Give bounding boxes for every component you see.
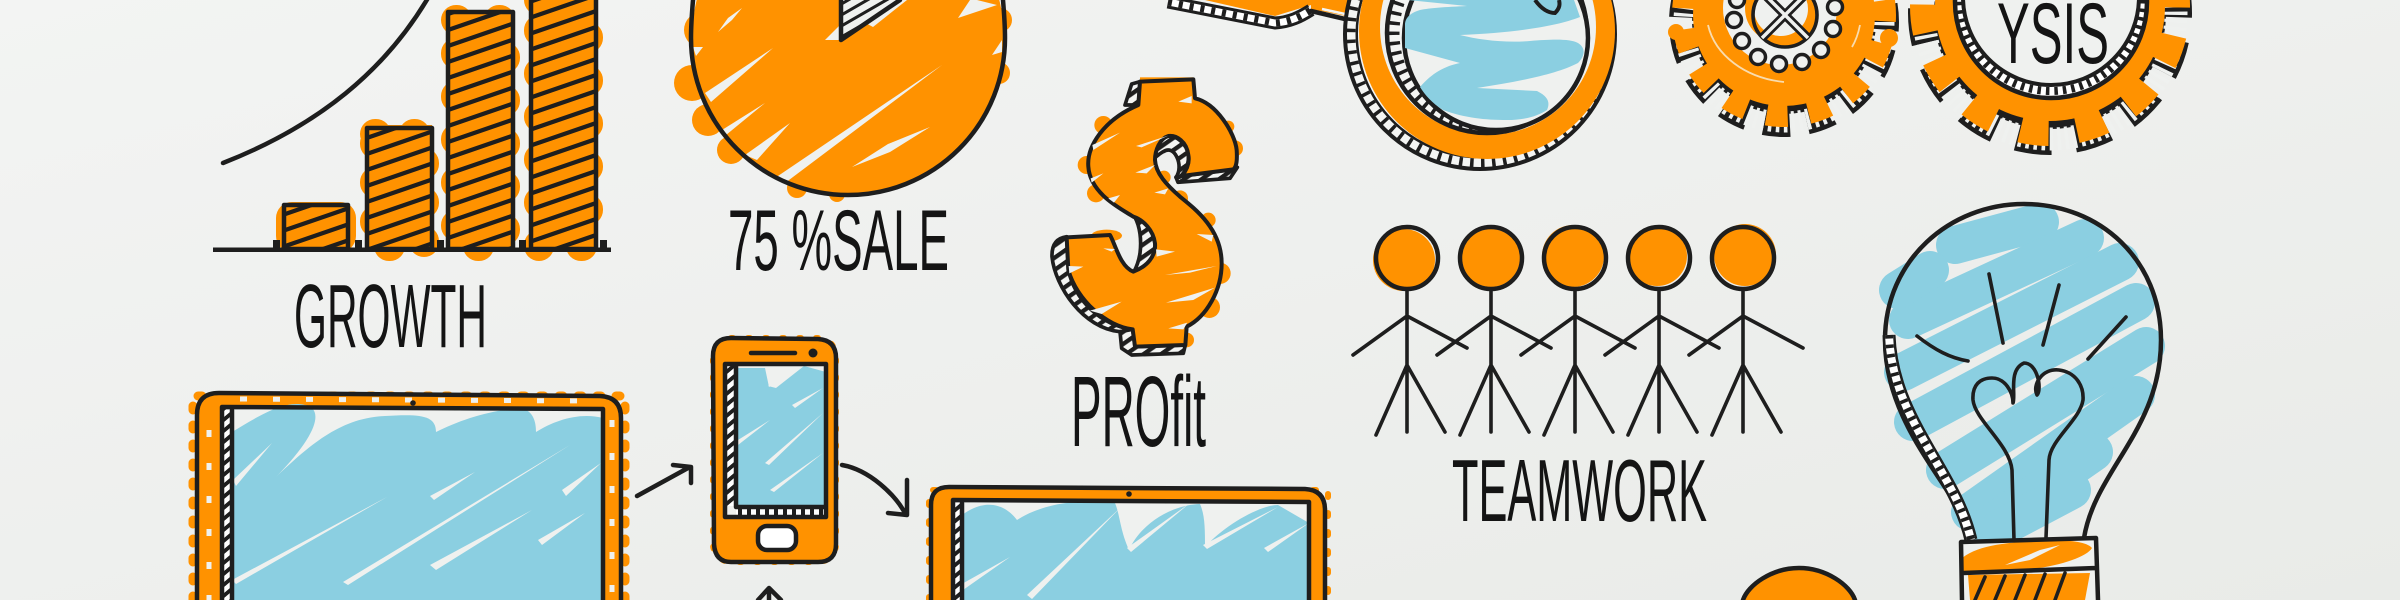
bar 3 [448, 10, 513, 252]
white inner ring [1380, 0, 1596, 135]
home button [758, 526, 796, 550]
person 5 [1689, 224, 1803, 435]
hatched edge [1889, 335, 1971, 540]
handle [1168, 0, 1350, 23]
highlight arcs [1708, 25, 1860, 82]
light streaks [693, 0, 1002, 183]
icon: small round dome [1741, 568, 1857, 600]
base [1960, 538, 2098, 600]
lens with inner hatch [1387, 0, 1588, 133]
screen background [222, 407, 603, 600]
outlines [197, 393, 621, 600]
dollar face [1067, 79, 1237, 347]
chart: growth bars [213, 0, 611, 252]
text: GROWTH [294, 267, 487, 367]
screen blue scribble [232, 404, 603, 600]
streaks [960, 503, 1309, 599]
frame fringe [193, 396, 625, 600]
growth curve [223, 0, 428, 163]
streaks [232, 443, 601, 585]
outer hatched rim [1345, 0, 1615, 169]
light streaks [1069, 96, 1217, 329]
camera dot [1126, 491, 1132, 497]
icon: magnifying glass [1168, 0, 1615, 169]
icon: dollar sign [1052, 77, 1243, 355]
person 4 [1605, 226, 1719, 435]
filament [1973, 363, 2083, 540]
device: right tablet [929, 487, 1328, 600]
bulb outline [1885, 204, 2161, 542]
text: PROfit [1071, 356, 1206, 468]
orange ring [1359, 0, 1615, 159]
tablet frame [933, 489, 1323, 600]
speaker and sensor [751, 351, 795, 355]
person 2 [1437, 227, 1551, 435]
hatched strips [725, 366, 736, 506]
label: 75 percent sale: 75 %SALE [728, 193, 949, 289]
device: phone [713, 338, 836, 562]
device: left tablet [193, 393, 625, 600]
bar 1 [276, 202, 356, 252]
gear shadow [1900, 0, 2200, 163]
arrow: upward bottom [758, 588, 781, 600]
person 1 [1353, 227, 1467, 435]
orange fill and blobs [674, 0, 1012, 202]
hatched side strip [953, 502, 962, 600]
phone streaks [738, 366, 823, 492]
group: teamwork people [1353, 224, 1803, 435]
bar 4 [531, 0, 596, 252]
gear shadow [1662, 0, 1906, 144]
phone outline [713, 338, 836, 562]
icon: small gear [1662, 0, 1906, 144]
blue scribble [1898, 222, 2146, 528]
arrow: phone to tablet [842, 465, 907, 515]
axis [213, 240, 611, 252]
hub with cross [1752, 0, 1818, 48]
text: TEAMWORK [1452, 441, 1707, 540]
phone body [713, 338, 836, 562]
screen background [953, 500, 1309, 600]
dot ring [1726, 0, 1842, 72]
icon: large gear [1900, 0, 2200, 163]
hatched side strip [222, 407, 232, 600]
pie chart: 75 percent [674, 0, 1012, 202]
rays [1917, 274, 2126, 361]
outlines [931, 487, 1325, 600]
orange blobs [1078, 77, 1243, 347]
screen blue scribble [962, 501, 1309, 600]
icon: light bulb [1885, 204, 2161, 600]
camera dot [410, 400, 416, 406]
gear body [1662, 0, 1906, 137]
tablet frame [197, 395, 619, 600]
inner hatched ring [1955, 0, 2147, 98]
phone screen [725, 364, 826, 517]
person 3 [1521, 225, 1635, 435]
bar 2 [367, 125, 432, 252]
hatched faces [1052, 82, 1237, 355]
frame flecks [209, 399, 612, 600]
gear body [1900, 0, 2200, 156]
pie outline [691, 0, 1005, 195]
frame fringe [929, 490, 1328, 600]
pie wedge [841, 0, 900, 38]
arrow: tablet to phone [637, 465, 691, 496]
